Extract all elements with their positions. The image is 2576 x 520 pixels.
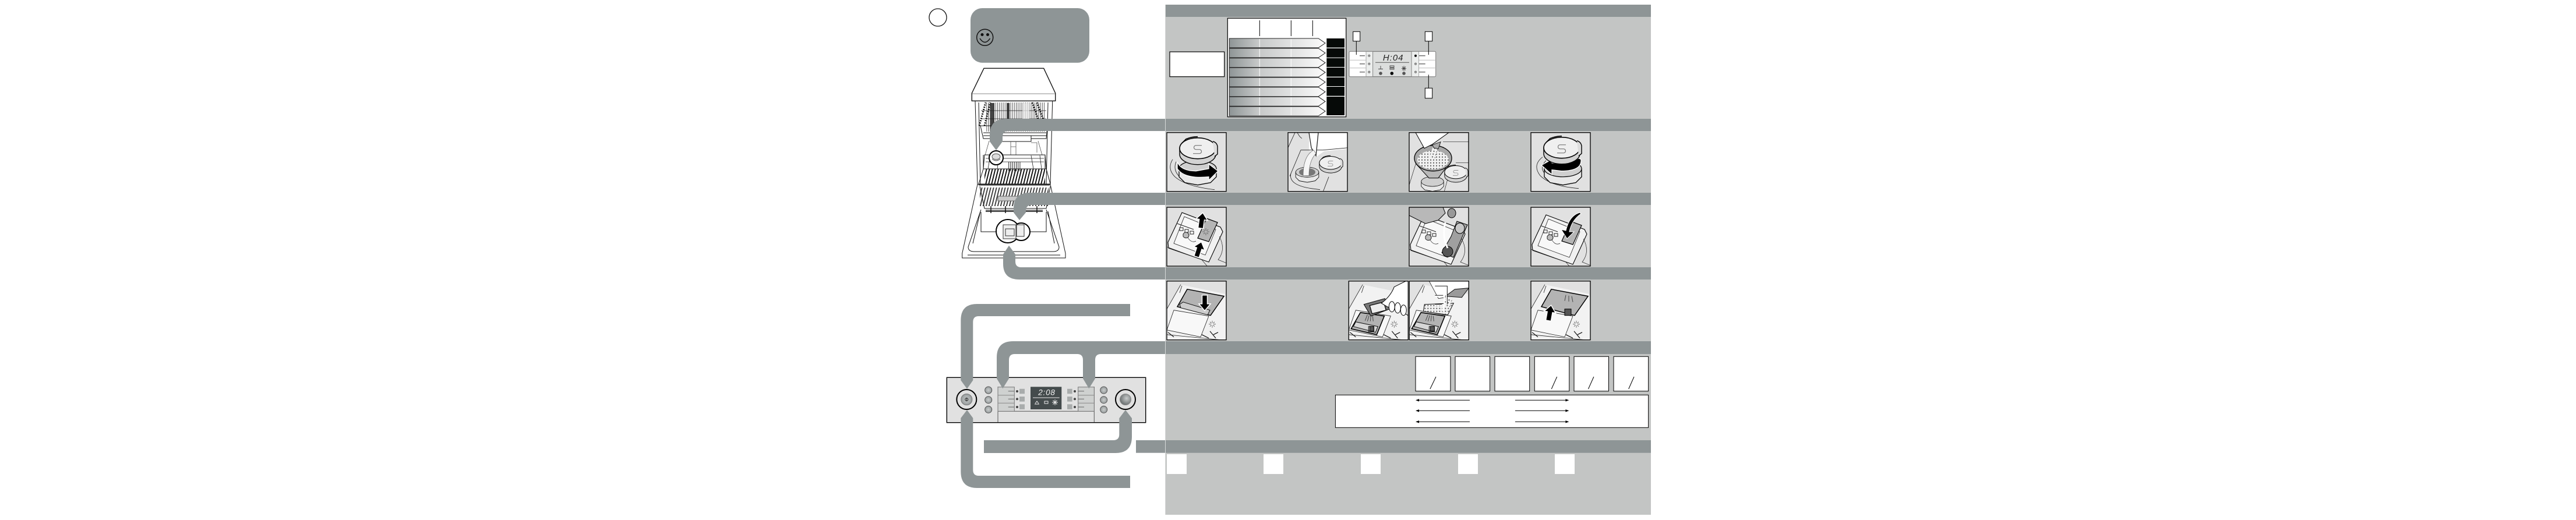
salt cap callout bbox=[989, 151, 1003, 165]
connector: to program buttons bbox=[997, 341, 1651, 388]
connector: salt band bbox=[990, 119, 1651, 150]
water hardness setting panel bbox=[1349, 51, 1436, 77]
black duration cells bbox=[1326, 38, 1345, 115]
programme chart bbox=[1227, 18, 1346, 117]
right program buttons bbox=[1067, 387, 1094, 411]
lower rack bbox=[979, 155, 1050, 208]
infographic canvas bbox=[929, 5, 1651, 515]
left program buttons bbox=[998, 387, 1025, 411]
worktop lid bbox=[972, 68, 1056, 101]
bottom band bbox=[1136, 440, 1651, 453]
image: open rinse aid cover bbox=[1167, 207, 1227, 267]
connector: detergent band bbox=[1003, 246, 1651, 280]
key labels bbox=[1353, 31, 1432, 98]
illustration: open dishwasher bbox=[962, 68, 1065, 258]
image: pour detergent powder bbox=[1409, 281, 1469, 341]
image: insert tablet bbox=[1349, 281, 1409, 341]
image: close rinse aid cover bbox=[1531, 207, 1591, 269]
image: pour water bbox=[1288, 133, 1348, 192]
control panel bbox=[947, 377, 1146, 423]
connector: to power button from below bbox=[961, 410, 1130, 488]
programme option boxes bbox=[1416, 356, 1649, 391]
step circle bbox=[929, 9, 947, 26]
spray arm and tub lines bbox=[984, 141, 1043, 157]
door interior bbox=[962, 185, 1065, 258]
header band bbox=[1166, 5, 1651, 17]
label box bbox=[1170, 52, 1225, 77]
power button bbox=[957, 390, 976, 409]
icon: smiley bbox=[977, 29, 993, 45]
dispenser callout bbox=[996, 220, 1030, 243]
image: unscrew salt cap bbox=[1167, 133, 1226, 192]
image: fill salt through funnel bbox=[1409, 133, 1469, 192]
tub body bbox=[975, 101, 1053, 185]
programme arrows bbox=[1229, 38, 1325, 116]
panel: instructions background bbox=[1166, 17, 1651, 515]
step number boxes bbox=[1167, 454, 1575, 474]
digital display: 2:08 bbox=[1038, 388, 1056, 397]
image: close detergent cover bbox=[1531, 281, 1591, 341]
connector: rinse aid band bbox=[1014, 193, 1651, 220]
start button bbox=[1116, 390, 1135, 409]
upper rack bbox=[979, 102, 1047, 142]
display reading: H:04 bbox=[1383, 53, 1404, 63]
note box with smiley bbox=[971, 8, 1089, 63]
connector: to start button bbox=[984, 410, 1132, 453]
rack wheels bbox=[986, 206, 1043, 213]
digital display bbox=[1031, 387, 1061, 409]
image: screw salt cap bbox=[1531, 133, 1590, 192]
connector: to power button from above bbox=[961, 304, 1130, 389]
legend box with arrows bbox=[1335, 395, 1649, 427]
image: fill rinse aid bbox=[1409, 207, 1469, 269]
image: press detergent latch bbox=[1167, 281, 1227, 341]
small round buttons bbox=[985, 387, 1107, 413]
